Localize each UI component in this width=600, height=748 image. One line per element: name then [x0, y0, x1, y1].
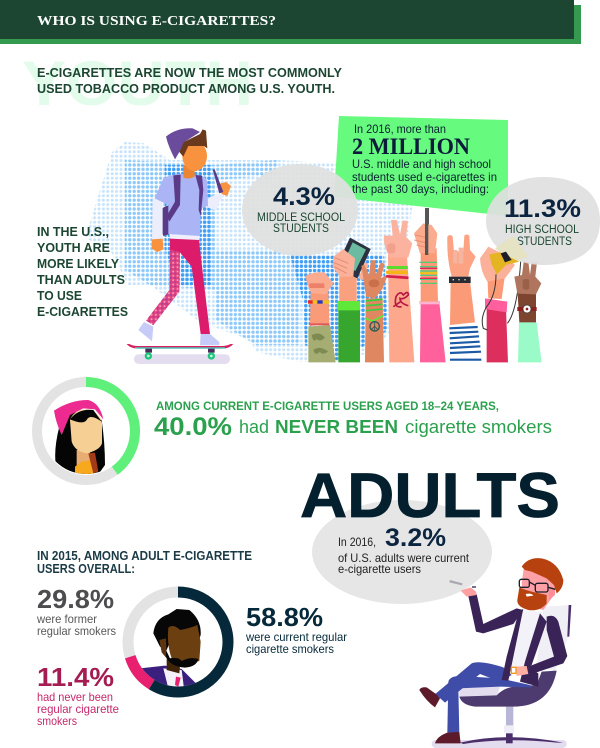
- green protest sign: [334, 116, 508, 256]
- icon: man with beard: [140, 609, 201, 692]
- left statement: youth more likely: [37, 224, 128, 319]
- arm 6: rock sign with striped sleeve: [447, 234, 481, 360]
- stat: 29.8% former smokers: regular smokers: [37, 624, 116, 638]
- arm 4: peace sign with tattoo: [384, 220, 414, 362]
- stat: 58.8% current smokers: [245, 602, 347, 656]
- left statement: youth more likely: E-CIGARETTES: [37, 304, 128, 319]
- icon: young woman with pink beanie: [54, 400, 105, 477]
- stat: 11.4% never regular smokers: 11.4%: [37, 662, 114, 692]
- arm 8: brown peace sign with watch: [514, 262, 542, 362]
- arm 5: hand holding pole: [414, 215, 446, 362]
- section heading: adult users overall: IN 2015, AMONG ADULT E-CIGARETTE: [37, 549, 252, 563]
- donut: adult smoking status: [128, 592, 228, 692]
- stat: 11.4% never regular smokers: had never been: [37, 690, 113, 704]
- green protest sign: students used e-cigarettes in: [352, 170, 497, 184]
- stat: 58.8% current smokers: 58.8%: [246, 602, 323, 632]
- statement: 40.0% never been smokers: 40.0%: [154, 413, 232, 441]
- bubble: middle school students: MIDDLE SCHOOL: [257, 212, 346, 224]
- illustration: seated man with e-cigarette: [419, 558, 571, 748]
- arm 2: hand with phone: [333, 238, 371, 362]
- bubble: middle school students: STUDENTS: [273, 223, 329, 235]
- section heading: adult users overall: [37, 549, 252, 576]
- green protest sign: the past 30 days, including:: [352, 182, 489, 196]
- statement: 40.0% never been smokers: had: [239, 417, 269, 437]
- stat: 29.8% former smokers: [36, 584, 116, 638]
- stat: 11.4% never regular smokers: [37, 662, 119, 728]
- stat: 58.8% current smokers: cigarette smokers: [246, 642, 334, 656]
- bubble: high school students: 11.3%: [504, 195, 581, 223]
- arm 7: hand with vape device: [480, 247, 521, 362]
- left statement: youth more likely: MORE LIKELY: [37, 256, 119, 271]
- youth watermark heading: YOUTH: [22, 49, 253, 119]
- header banner: WHO IS USING E-CIGARETTES?: [37, 14, 276, 29]
- illustration: teen on skateboard: [127, 128, 233, 364]
- statement: 40.0% never been smokers: NEVER BEEN: [275, 417, 398, 437]
- intro statement: [37, 66, 343, 96]
- adult prevalence text: e-cigarette users: [338, 562, 421, 576]
- bubble: high school students: [486, 177, 600, 265]
- green protest sign: In 2016, more than: [354, 122, 446, 136]
- dotted map of the U.S.: [85, 142, 415, 362]
- intro statement: E-CIGARETTES ARE NOW THE MOST COMMONLY: [37, 66, 343, 80]
- bubble: 3.2% of adults: [312, 500, 492, 604]
- donut: young adults who never smoked: [37, 382, 135, 480]
- adult prevalence text: of U.S. adults were current: [338, 551, 470, 565]
- green protest sign: 2 MILLION: [352, 134, 470, 159]
- stat: 29.8% former smokers: 29.8%: [37, 584, 114, 614]
- stat: 58.8% current smokers: were current regular: [245, 630, 347, 644]
- arm 3: open hand with green bands: [361, 260, 388, 362]
- adult prevalence text: 3.2%: [385, 524, 446, 552]
- bubble: middle school students: 4.3%: [273, 183, 335, 211]
- stat: 29.8% former smokers: were former: [36, 612, 97, 626]
- header banner: [0, 0, 581, 44]
- stat: 11.4% never regular smokers: regular cigarette: [37, 702, 119, 716]
- hands group, right half: [447, 234, 542, 362]
- vape device held over the bubble: [489, 236, 528, 274]
- left statement: youth more likely: IN THE U.S.,: [37, 224, 109, 239]
- statement: 40.0% never been smokers: AMONG CURRENT E-CIGARETTE USERS AGED 18–24 YEARS,: [156, 399, 499, 413]
- bubble: middle school students: [242, 164, 358, 256]
- statement: 40.0% never been smokers: [154, 399, 552, 441]
- adults heading: ADULTS: [300, 461, 560, 531]
- adult prevalence text: [338, 524, 470, 576]
- arm 1: fist with rainbow band: [306, 272, 336, 362]
- stat: 11.4% never regular smokers: smokers: [37, 714, 77, 728]
- bubble: high school students: STUDENTS: [517, 236, 572, 248]
- green protest sign: U.S. middle and high school: [352, 157, 491, 171]
- left statement: youth more likely: YOUTH ARE: [37, 240, 110, 255]
- bubble: high school students: HIGH SCHOOL: [505, 224, 580, 236]
- statement: 40.0% never been smokers: cigarette smokers: [405, 417, 552, 437]
- section heading: adult users overall: USERS OVERALL:: [37, 562, 135, 576]
- raised hands illustration: [306, 215, 446, 362]
- intro statement: USED TOBACCO PRODUCT AMONG U.S. YOUTH.: [37, 82, 335, 96]
- adult prevalence text: In 2016,: [338, 535, 376, 549]
- left statement: youth more likely: TO USE: [37, 288, 82, 303]
- left statement: youth more likely: THAN ADULTS: [37, 272, 125, 287]
